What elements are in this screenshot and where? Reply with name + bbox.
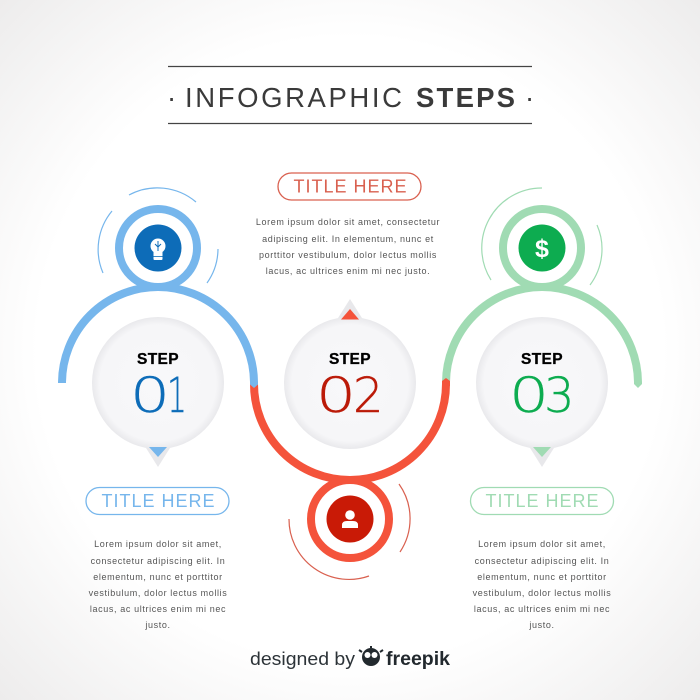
icon: dollar ring	[482, 188, 602, 287]
text block: step 3: justo.	[528, 620, 555, 630]
text block: step 1: vestibulum, dolor lectus mollis	[89, 588, 227, 598]
step 1 badge: 1	[167, 368, 187, 424]
step 2 badge: STEP	[329, 351, 371, 368]
title pill: step 1: TITLE HERE	[102, 491, 214, 511]
step 3 badge: 0	[509, 368, 549, 424]
text block: step 2: Lorem ipsum dolor sit amet, consectetur	[256, 217, 440, 227]
title block: ·	[167, 82, 176, 113]
footer credit: designed by	[250, 649, 355, 669]
text block: step 3	[473, 539, 611, 630]
footer credit: freepik	[386, 649, 450, 670]
text block: step 3: consectetur adipiscing elit. In	[475, 556, 609, 566]
step 1 connector arc	[62, 287, 254, 383]
text block: step 2	[256, 217, 440, 276]
title pill: step 2: TITLE HERE	[294, 176, 406, 196]
step 3 badge: 3	[544, 368, 575, 424]
title block	[167, 66, 534, 124]
step 1 badge: STEP	[137, 351, 179, 368]
icon: dollar ring: $	[535, 235, 549, 263]
step 2 badge: 2	[353, 368, 384, 424]
title pill: step 1	[86, 488, 229, 514]
step 3 connector arc	[446, 287, 638, 383]
text block: step 3: Lorem ipsum dolor sit amet,	[478, 539, 606, 549]
step 3 badge: STEP	[521, 351, 563, 368]
text block: step 1: elementum, nunc et porttitor	[93, 572, 223, 582]
title pill: step 3	[470, 488, 614, 514]
step 2 connector arc	[254, 384, 446, 480]
title block: ·	[525, 82, 534, 113]
icon: person ring	[289, 480, 410, 579]
title block: INFOGRAPHIC	[185, 82, 402, 113]
text block: step 1: lacus, ac ultrices enim mi nec	[90, 604, 226, 614]
title pill: step 2	[278, 173, 421, 200]
text block: step 1: Lorem ipsum dolor sit amet,	[94, 539, 222, 549]
text block: step 3: vestibulum, dolor lectus mollis	[473, 588, 611, 598]
text block: step 2: lacus, ac ultrices enim mi nec justo.	[266, 266, 430, 276]
text block: step 3: lacus, ac ultrices enim mi nec	[474, 604, 610, 614]
title block: STEPS	[416, 82, 515, 113]
ring joints	[133, 278, 567, 488]
title pill: step 3: TITLE HERE	[486, 491, 598, 511]
text block: step 1: justo.	[144, 620, 171, 630]
step 1 badge	[92, 317, 224, 467]
step 3 badge	[476, 317, 608, 467]
step 2 badge: 0	[316, 368, 356, 424]
text block: step 3: elementum, nunc et porttitor	[477, 572, 607, 582]
footer credit	[250, 646, 450, 670]
arc tips	[250, 378, 642, 388]
text block: step 1: consectetur adipiscing elit. In	[91, 556, 225, 566]
step 2 badge	[284, 299, 416, 449]
icon: light bulb ring	[98, 188, 218, 287]
text block: step 2: porttitor vestibulum, dolor lectus mollis	[259, 250, 437, 260]
step 1 badge: 0	[130, 368, 170, 424]
text block: step 1	[89, 539, 227, 630]
text block: step 2: adipiscing elit. In elementum, nunc et	[262, 234, 434, 244]
